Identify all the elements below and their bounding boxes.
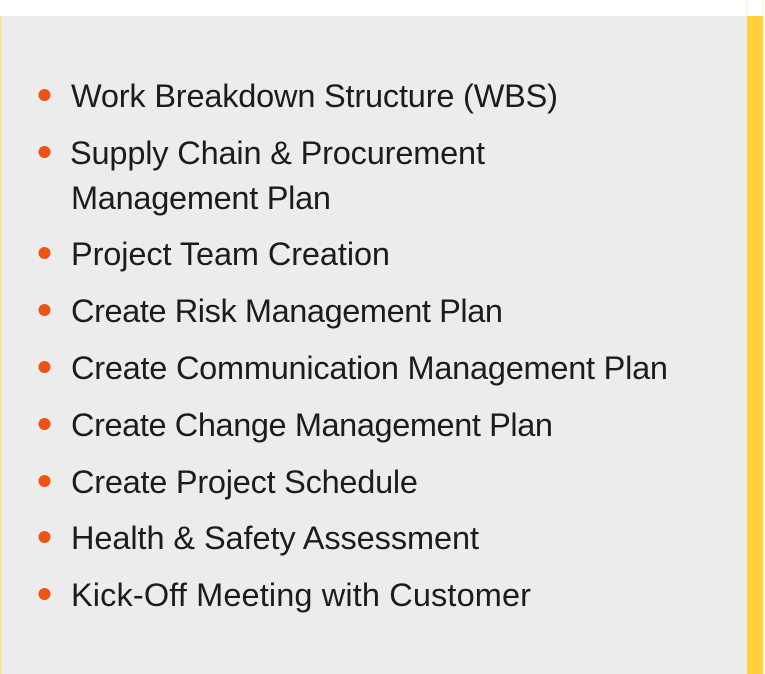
list item: WBS: Work Breakdown Structure (WBS) — [71, 78, 558, 114]
checklist — [38, 78, 668, 613]
list item: supply chain plan — [38, 135, 485, 216]
right yellow accent bar — [747, 16, 763, 674]
list item: kick-off meeting: Kick-Off Meeting with Customer — [71, 577, 531, 613]
list item: supply chain plan: Supply Chain & Procurement — [70, 135, 485, 171]
left yellow edge line — [0, 16, 2, 674]
list item: supply chain plan: Management Plan — [71, 180, 331, 216]
list item: project schedule: Create Project Schedule — [71, 464, 418, 500]
list item: health and safety: Health & Safety Assessment — [71, 520, 479, 556]
list item: project team: Project Team Creation — [71, 236, 390, 272]
list item: change plan: Create Change Management Plan — [71, 407, 553, 443]
list item: communication plan: Create Communication Management Plan — [71, 350, 668, 386]
list item: risk plan: Create Risk Management Plan — [71, 293, 503, 329]
